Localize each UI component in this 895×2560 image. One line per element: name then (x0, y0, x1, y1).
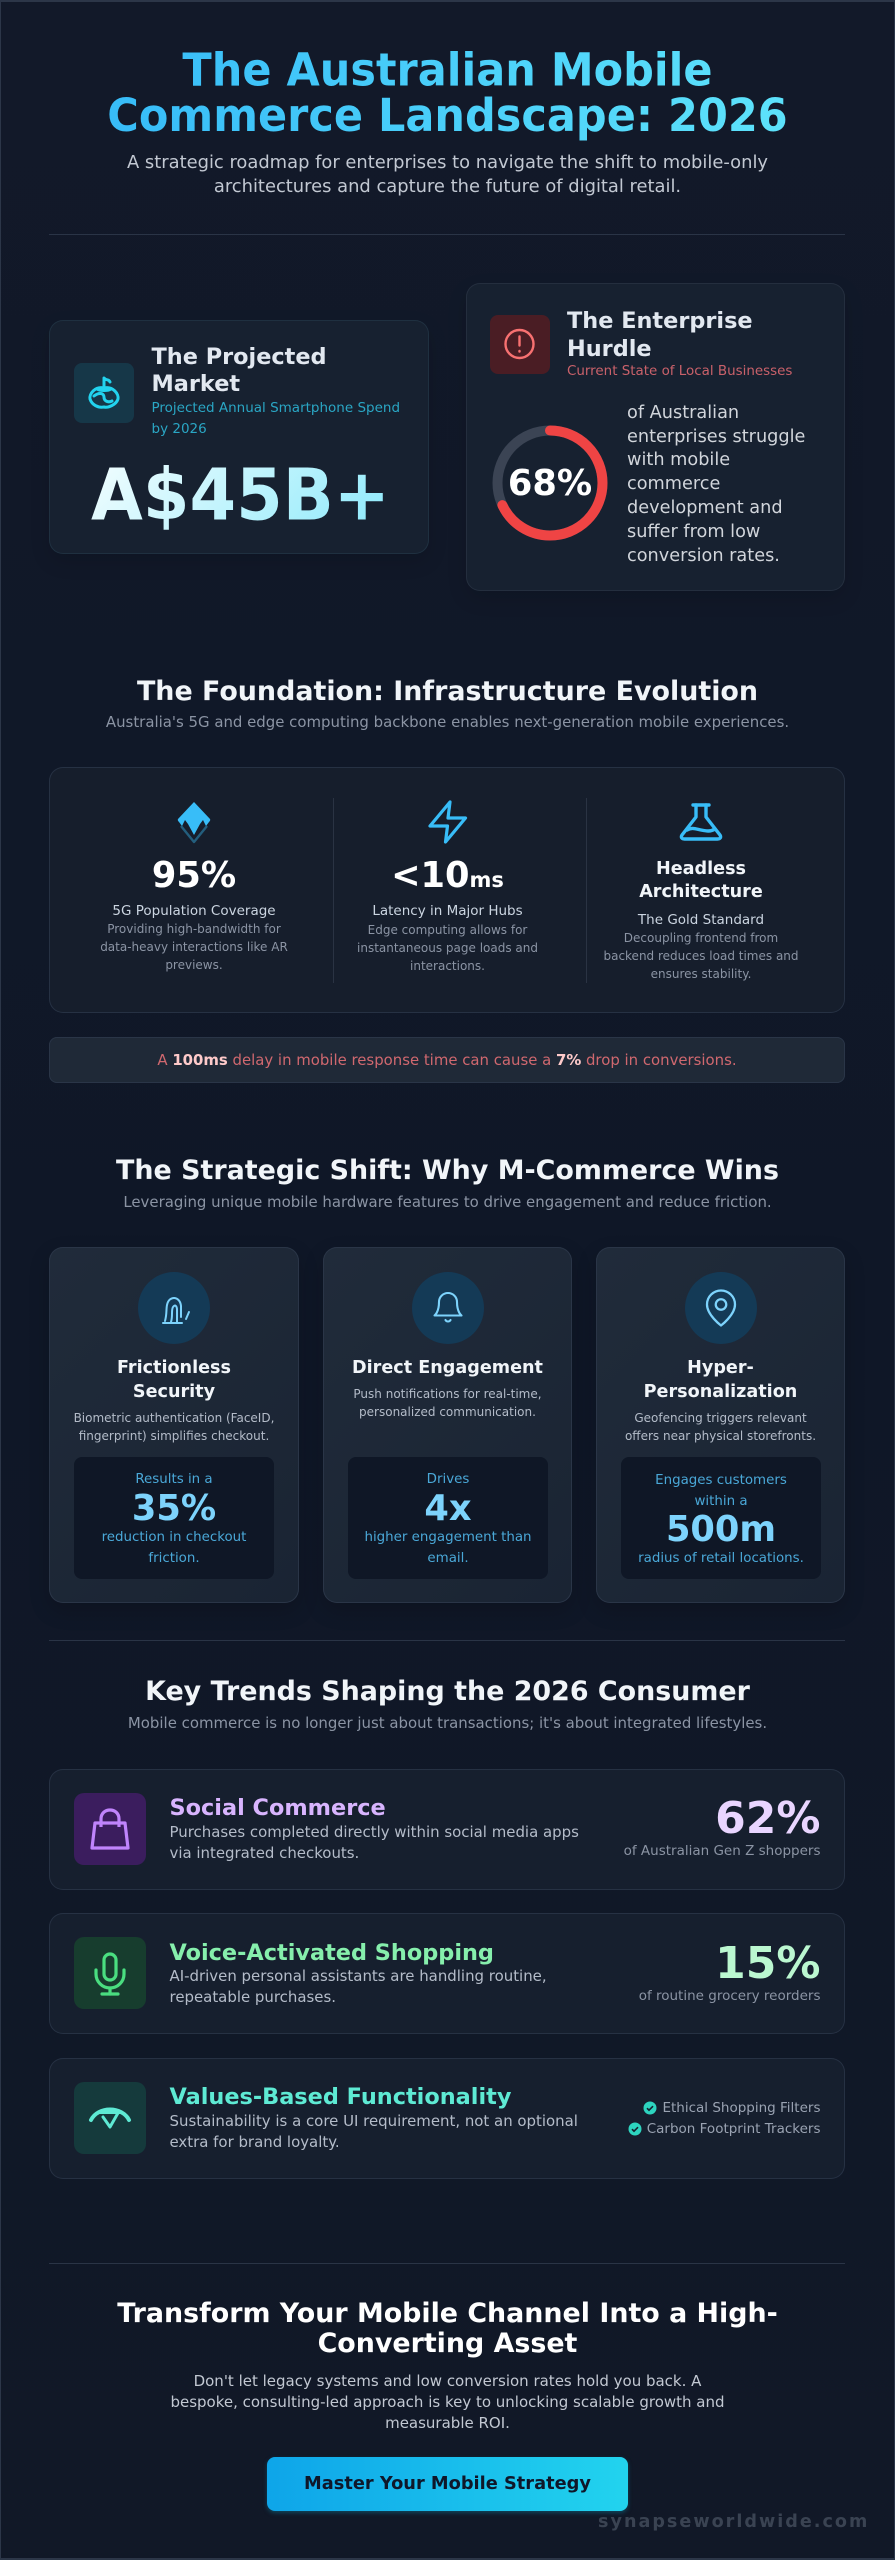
description: offers near physical storefronts. (625, 1429, 816, 1443)
panel: projected market (49, 320, 429, 554)
description: Don't let legacy systems and low conversion rates hold you back. A (194, 2372, 701, 2390)
description: Sustainability is a core UI requirement, not an optional (170, 2112, 578, 2130)
heading (639, 859, 763, 902)
heading: Frictionless (117, 1358, 231, 1378)
stat note: email. (427, 1551, 469, 1566)
panel: enterprise hurdle (466, 283, 845, 591)
description: enterprises struggle (627, 427, 805, 447)
call to action (117, 2298, 778, 2515)
description: measurable ROI. (385, 2414, 510, 2432)
subheading: foundation: Australia's 5G and edge computing backbone enables next-generation mobile experiences. (106, 713, 789, 731)
heading: key trends: Key Trends Shaping the 2026 Consumer (145, 1676, 750, 1707)
callout: delay impact: A 100ms delay in mobile response time can cause a 7% drop in conversions. (157, 1051, 737, 1069)
stat: latency (357, 800, 538, 973)
stat note: friction. (148, 1551, 200, 1566)
heading: Security (133, 1382, 215, 1402)
description (170, 2112, 578, 2151)
stat note: reduction in checkout (102, 1530, 246, 1545)
heading: Direct Engagement (352, 1358, 543, 1378)
heading: The Enterprise (567, 308, 753, 334)
stat box (348, 1457, 548, 1579)
description (170, 1967, 547, 2006)
description: extra for brand loyalty. (170, 2133, 340, 2151)
stat intro: within a (694, 1494, 748, 1509)
heading: strategic shift: The Strategic Shift: Why M-Commerce Wins (116, 1155, 779, 1186)
stat note: radius of retail locations. (638, 1551, 804, 1566)
description: Providing high-bandwidth for (107, 922, 281, 936)
description: backend reduces load times and (603, 949, 799, 963)
stat note: higher engagement than (364, 1530, 532, 1545)
description (170, 2372, 725, 2432)
stat intro: Engages customers (655, 1473, 787, 1488)
description: with mobile (627, 450, 730, 470)
caption: Projected Annual Smartphone Spend (152, 400, 400, 416)
caption: by 2026 (152, 421, 207, 437)
description: bespoke, consulting-led approach is key to unlocking scalable growth and (170, 2393, 725, 2411)
check item: carbon trackers: Carbon Footprint Trackers (647, 2121, 820, 2137)
stat value: 15% (715, 1938, 820, 1989)
description: development and (627, 498, 783, 518)
value: <10ms (391, 855, 504, 896)
panel: hyper-personalization (596, 1247, 845, 1603)
description (357, 923, 538, 973)
donut chart 68% (492, 426, 608, 540)
stat intro (655, 1473, 787, 1509)
description: conversion rates. (627, 546, 780, 566)
description: Push notifications for real-time, (353, 1387, 542, 1401)
heading: Converting Asset (318, 2328, 577, 2359)
description: data-heavy interactions like AR (100, 940, 288, 954)
stat note (102, 1530, 246, 1566)
watermark: synapseworldwide.com (598, 2512, 869, 2532)
description: of Australian (627, 403, 739, 423)
stat: 5G coverage (100, 802, 288, 972)
heading: Headless (656, 859, 746, 879)
stat value: 4x (424, 1488, 472, 1529)
callout: delay impact (49, 1037, 845, 1083)
stat intro: Drives (427, 1472, 469, 1487)
stat box (621, 1457, 821, 1579)
title: Commerce Landscape: 2026 (107, 90, 788, 142)
heading: Voice-Activated Shopping (170, 1940, 494, 1966)
value: 95% (152, 855, 236, 896)
donut value: 68% (508, 463, 592, 504)
icon: microphone (74, 1937, 146, 2009)
description (625, 1411, 816, 1443)
heading: Market (152, 371, 240, 397)
heading (644, 1358, 797, 1402)
icon: leaf check (74, 2082, 146, 2154)
description: Purchases completed directly within social media apps (170, 1823, 579, 1841)
heading: Values-Based Functionality (170, 2084, 511, 2110)
stat value: 500m (666, 1509, 776, 1550)
icon: diamond layers (178, 802, 210, 844)
heading (117, 2298, 778, 2359)
heading: foundation: The Foundation: Infrastructure Evolution (137, 676, 758, 707)
icon: alert (490, 315, 550, 374)
description: Decoupling frontend from (624, 931, 778, 945)
big number: A$45B+ (91, 453, 390, 536)
caption (152, 400, 400, 437)
description (74, 1411, 274, 1443)
heading (152, 344, 327, 397)
subheading: strategic shift: Leveraging unique mobile hardware features to drive engagement and reduce friction. (123, 1193, 772, 1211)
check item: ethical filters: Ethical Shopping Filters (662, 2100, 820, 2116)
stat intro: Results in a (135, 1472, 213, 1487)
stat label: of routine grocery reorders (639, 1988, 820, 2004)
header (107, 45, 788, 197)
heading: Transform Your Mobile Channel Into a High- (117, 2298, 778, 2329)
checklist (628, 2100, 820, 2137)
description (627, 403, 805, 566)
subtitle: architectures and capture the future of digital retail. (214, 176, 681, 197)
heading (567, 308, 753, 362)
icon: fingerprint (138, 1272, 210, 1344)
description (170, 1823, 579, 1862)
description: commerce (627, 474, 720, 494)
subtitle (127, 152, 768, 197)
panel: foundation stats (49, 767, 845, 1013)
description: personalized communication. (359, 1405, 536, 1419)
description (100, 922, 288, 972)
description: repeatable purchases. (170, 1988, 336, 2006)
stat note (364, 1530, 532, 1566)
description: fingerprint) simplifies checkout. (79, 1429, 269, 1443)
description: suffer from low (627, 522, 760, 542)
heading: The Projected (152, 344, 327, 370)
heading: Social Commerce (170, 1795, 386, 1821)
description (353, 1387, 542, 1419)
icon: bolt (428, 800, 468, 844)
icon: bell (412, 1272, 484, 1344)
heading: Hurdle (567, 336, 652, 362)
description: AI-driven personal assistants are handling routine, (170, 1967, 547, 1985)
description: Edge computing allows for (368, 923, 527, 937)
panel: direct engagement (323, 1247, 572, 1603)
stat value: 62% (715, 1793, 820, 1844)
description: Geofencing triggers relevant (634, 1411, 807, 1425)
stat label: of Australian Gen Z shoppers (624, 1843, 820, 1859)
heading: Hyper- (687, 1358, 754, 1378)
caption: Current State of Local Businesses (567, 364, 792, 378)
icon: shopping bag (74, 1793, 146, 1865)
description (603, 931, 799, 981)
title: The Australian Mobile (182, 45, 713, 97)
label: 5G Population Coverage (112, 903, 276, 919)
heading: Personalization (644, 1382, 797, 1402)
heading: Architecture (639, 882, 763, 902)
button: Master Your Mobile Strategy (304, 2473, 591, 2494)
button (267, 2457, 628, 2511)
description: previews. (165, 958, 223, 972)
description: instantaneous page loads and (357, 941, 538, 955)
panel: values-based functionality (49, 2058, 845, 2179)
description: Biometric authentication (FaceID, (74, 1411, 274, 1425)
panel: voice shopping (49, 1913, 845, 2034)
label: Latency in Major Hubs (372, 903, 523, 919)
panel: frictionless security (49, 1247, 299, 1603)
subheading: key trends: Mobile commerce is no longer just about transactions; it's about integrated lifestyles. (128, 1714, 767, 1732)
icon: flask (680, 803, 722, 841)
icon: map pin (685, 1272, 757, 1344)
panel: social commerce (49, 1769, 845, 1890)
description: ensures stability. (651, 967, 751, 981)
stat box (74, 1457, 274, 1579)
icon: money bag (74, 363, 134, 423)
title (0, 49, 895, 143)
subtitle: A strategic roadmap for enterprises to navigate the shift to mobile-only (127, 152, 768, 173)
stat value: 35% (132, 1488, 216, 1529)
heading (117, 1358, 231, 1402)
description: via integrated checkouts. (170, 1844, 359, 1862)
label: The Gold Standard (638, 912, 764, 928)
description: interactions. (410, 959, 485, 973)
stat: headless architecture (603, 803, 799, 981)
